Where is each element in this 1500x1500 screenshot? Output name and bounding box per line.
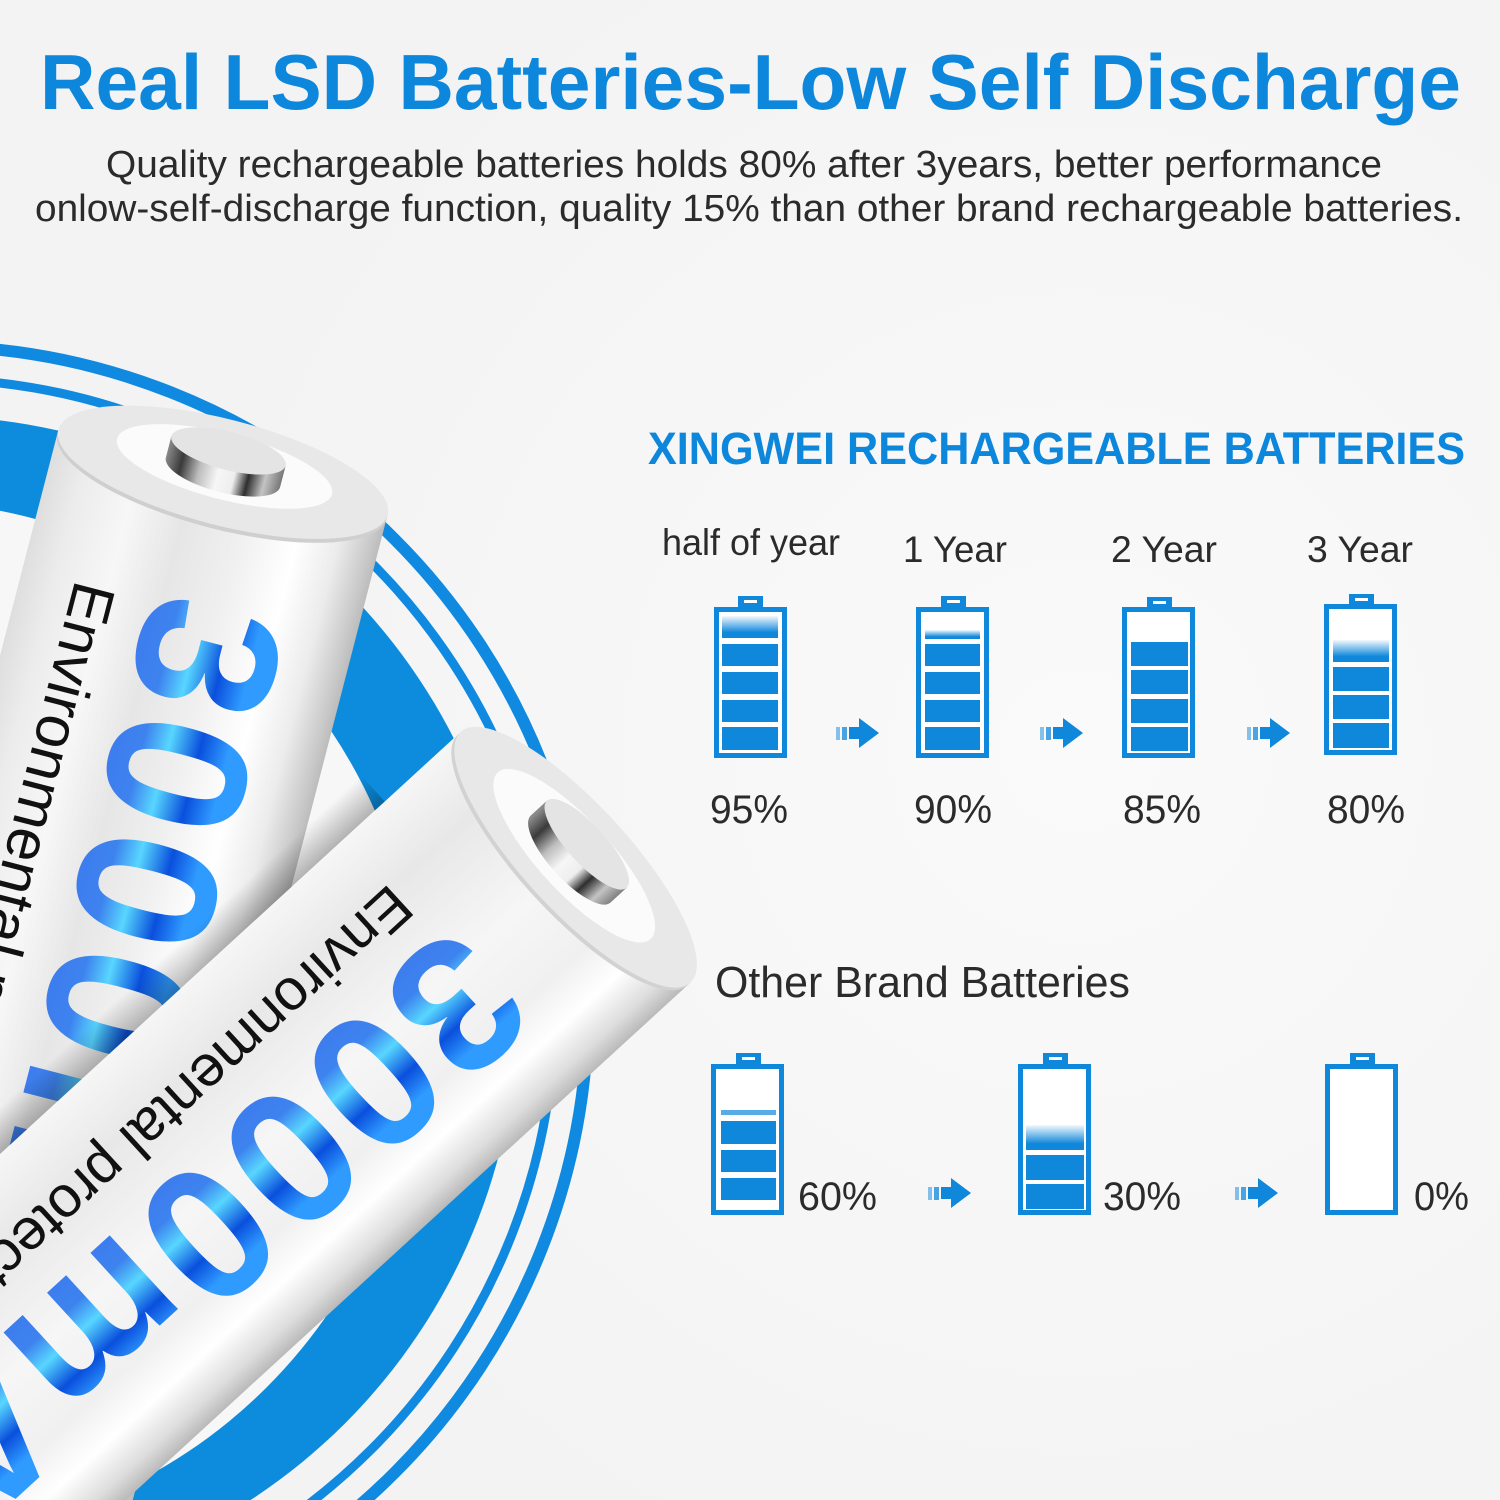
other battery icon 0% xyxy=(1328,1053,1396,1212)
arrow 1 xyxy=(836,718,879,748)
lower arrow 1 xyxy=(928,1178,971,1208)
heading: Xingwei batteries: XINGWEI RECHARGEABLE BATTERIES xyxy=(648,423,1465,474)
time labels: 2 Year xyxy=(1111,529,1217,570)
subtitle text: Quality rechargeable batteries holds 80% after 3years, better performance xyxy=(106,144,1382,186)
battery icon 90% xyxy=(918,596,986,756)
other battery icon 30% xyxy=(1020,1053,1088,1212)
rear battery body xyxy=(0,430,388,1500)
time labels xyxy=(662,522,1413,570)
subtitle text: onlow-self-discharge function, quality 15% than other brand rechargeable batteries. xyxy=(35,188,1463,230)
percent labels: Xingwei: 80% xyxy=(1327,788,1405,832)
time labels: 3 Year xyxy=(1307,529,1413,570)
heading: other brand: Other Brand Batteries xyxy=(715,958,1130,1007)
percent labels: Xingwei: 85% xyxy=(1123,788,1201,832)
subtitle text xyxy=(35,144,1463,230)
front battery xyxy=(0,670,730,1500)
lower arrow 2 xyxy=(1235,1178,1278,1208)
arrow 3 xyxy=(1247,718,1290,748)
front battery cast shadow xyxy=(0,776,385,1500)
battery icon 85% xyxy=(1124,597,1192,756)
other percent 30: 30% xyxy=(1103,1175,1181,1219)
percent labels: Xingwei xyxy=(710,788,1405,832)
rear battery xyxy=(0,378,401,1500)
battery icon 80% xyxy=(1326,594,1394,752)
percent labels: Xingwei: 90% xyxy=(914,788,992,832)
other percent 60: 60% xyxy=(798,1175,877,1219)
title: Real LSD Batteries-Low Self Discharge xyxy=(40,38,1461,126)
percent labels: Xingwei: 95% xyxy=(710,788,788,832)
time labels: half of year xyxy=(662,522,840,563)
time labels: 1 Year xyxy=(903,529,1007,570)
arrow 2 xyxy=(1040,718,1083,748)
battery icon 95% xyxy=(716,596,784,756)
decorative blue circle rings xyxy=(0,346,588,1500)
front battery cap xyxy=(419,696,730,1021)
other percent 0: 0% xyxy=(1414,1175,1469,1219)
rear battery cap xyxy=(44,378,401,570)
front battery body xyxy=(0,732,690,1500)
other battery icon 60% xyxy=(714,1053,782,1212)
